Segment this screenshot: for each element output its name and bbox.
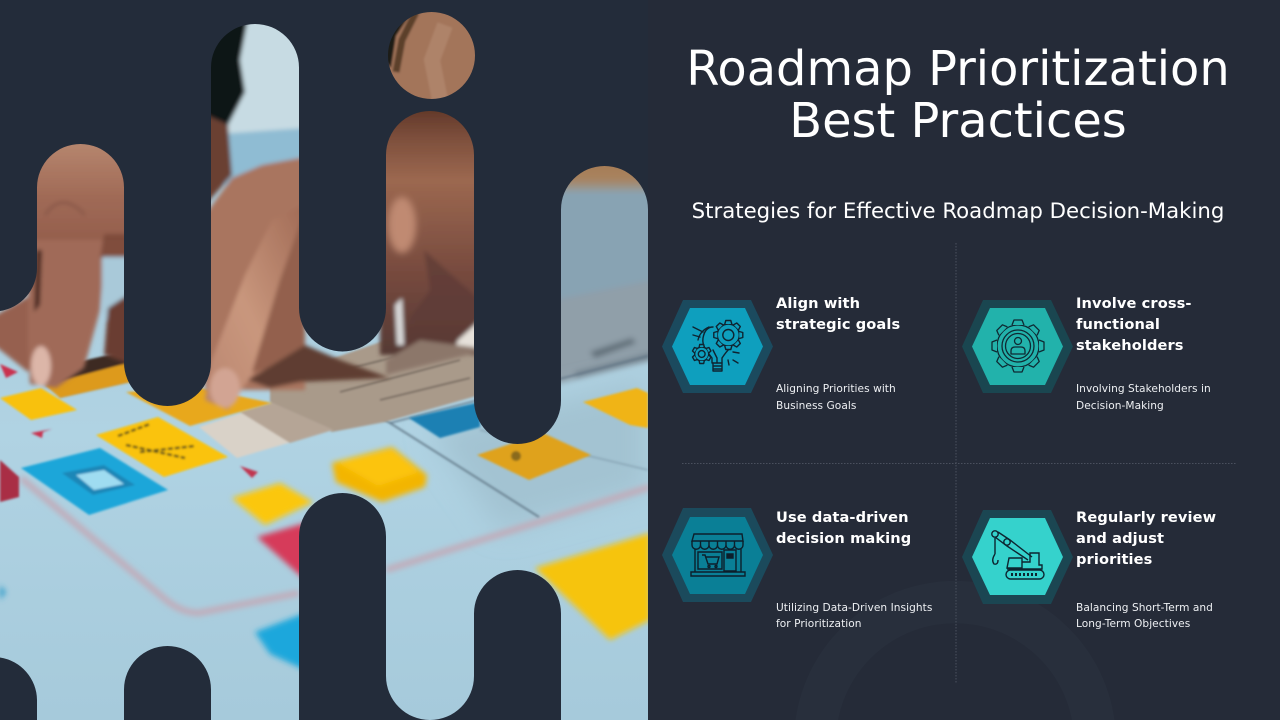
title [686,42,1230,148]
heading [776,509,911,547]
heading: strategic goals [776,316,900,333]
bottom pills [0,493,561,720]
description: Decision-Making [1076,400,1164,412]
dark rounded columns masking the photo [0,0,648,720]
card: regularly review and adjust priorities [962,509,1216,630]
description: Involving Stakeholders in [1076,383,1211,395]
heading: Involve cross- [1076,295,1192,312]
card: align with strategic goals [662,295,900,412]
heading: stakeholders [1076,337,1184,354]
description [776,383,896,412]
heading: priorities [1076,551,1152,568]
description: Aligning Priorities with [776,383,896,395]
bottom notch [386,676,474,720]
description: Long-Term Objectives [1076,618,1190,630]
upper right blurred table [555,158,654,385]
paper sheets [199,325,480,458]
hand, right knuckles [380,105,480,375]
icon: crane on hexagon [962,510,1073,604]
icon: lightbulb with gears on hexagon [662,300,773,393]
top circular crop: fingertip skin [384,8,478,102]
heading: and adjust [1076,530,1164,547]
photo panel: hands arranging sticky notes, cut by rounded columns [0,12,648,720]
top band with rounded openings [0,0,648,444]
heading [1076,509,1216,568]
heading: functional [1076,316,1160,333]
grey grid lines [303,356,648,517]
description: Balancing Short-Term and [1076,602,1213,614]
title: Roadmap Prioritization [686,42,1230,97]
description [1076,602,1213,630]
subtitle: Strategies for Effective Roadmap Decision-Making [692,199,1224,224]
heading: Regularly review [1076,509,1216,526]
hand, left finger [0,135,132,388]
description: Utilizing Data-Driven Insights [776,602,932,614]
description [1076,383,1211,412]
heading: Align with [776,295,860,312]
sticky notes [0,350,648,515]
card: use data-driven decision making [662,508,932,630]
description [776,602,932,630]
heading [1076,295,1192,354]
title: Best Practices [789,94,1127,148]
description: for Prioritization [776,618,862,630]
heading: decision making [776,530,911,547]
heading: Use data-driven [776,509,909,526]
table surface [0,0,648,720]
icon: storefront with cart on hexagon [662,508,773,602]
circular opening and knuckle column top [386,0,476,155]
icon: gear with person on hexagon [962,300,1073,393]
heading [776,295,900,333]
card: involve cross-functional stakeholders [962,295,1211,412]
darker table zone on the right [430,380,648,530]
pink route lines [21,478,650,613]
hand, centre fingers [205,18,390,410]
description: Business Goals [776,400,856,412]
